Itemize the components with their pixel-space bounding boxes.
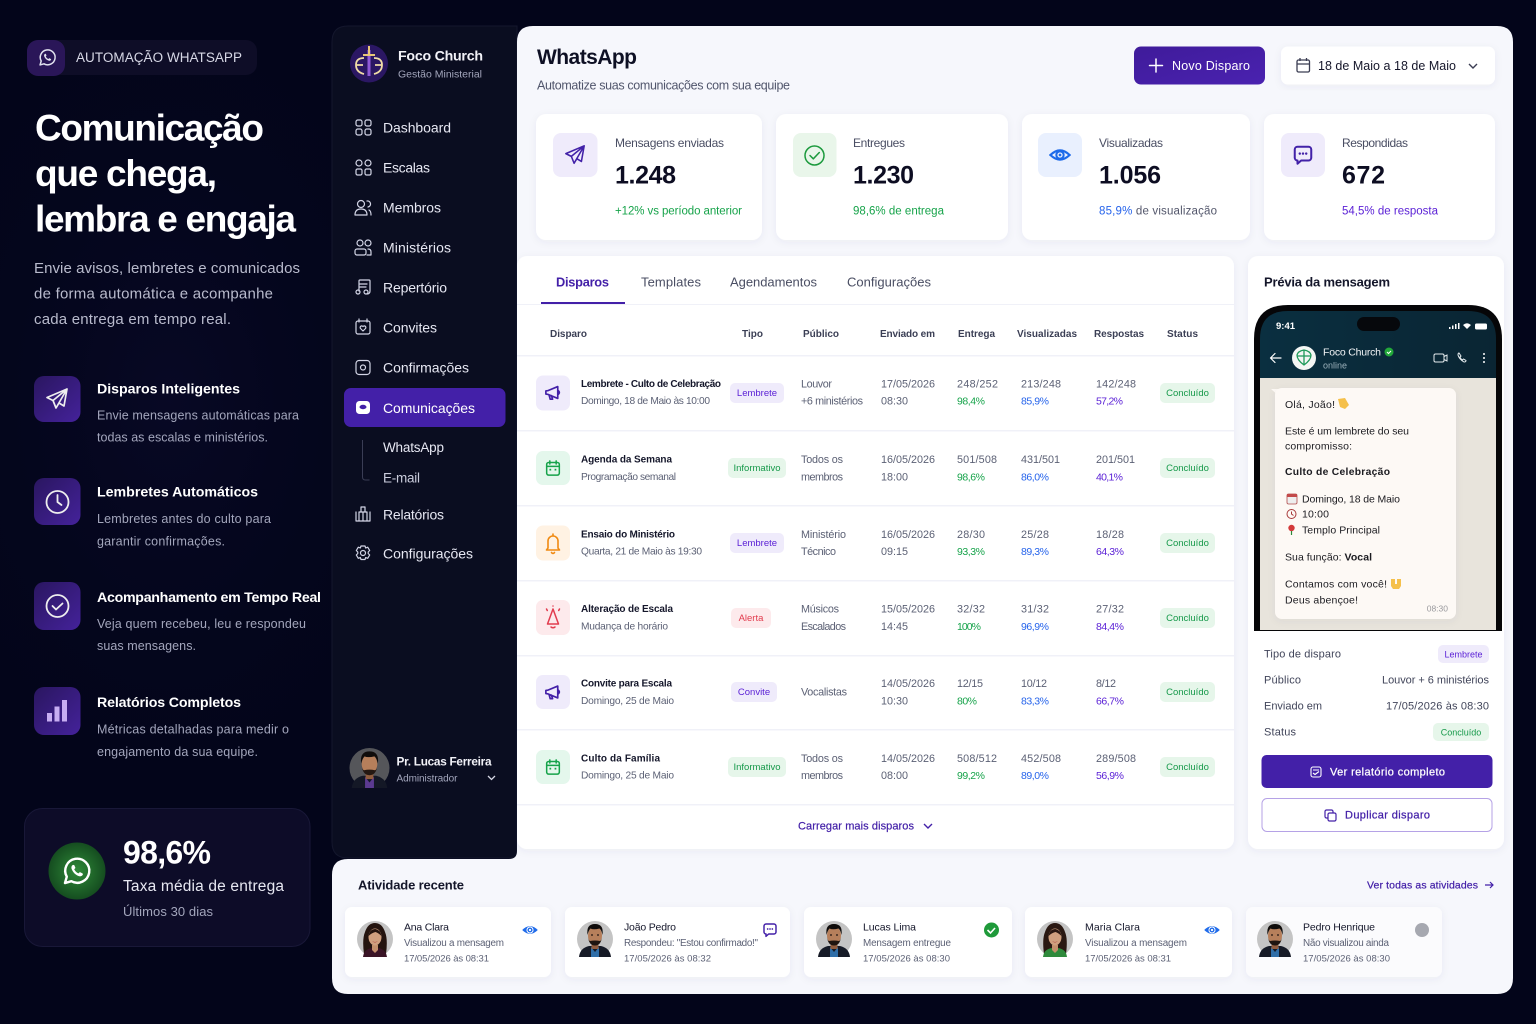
icon: megaphone bbox=[536, 376, 570, 410]
stat card: mensagens enviadas bbox=[536, 114, 762, 240]
row: ensaio do ministério: Lembrete bbox=[737, 538, 777, 549]
icon: calendar green bbox=[536, 750, 570, 784]
activity: maria clara: Maria Clara bbox=[1085, 922, 1140, 934]
row: convite para escala: 8/12 bbox=[1096, 678, 1116, 690]
stat card: entregues: 1.230 bbox=[853, 162, 914, 190]
nav: sub-items bbox=[362, 440, 444, 486]
table header: Visualizadas bbox=[1017, 329, 1077, 340]
activity: pedro henrique: Pedro Henrique bbox=[1303, 922, 1375, 934]
tabs bbox=[541, 275, 932, 304]
row: ensaio do ministério: 93,3% bbox=[957, 546, 985, 558]
activity: pedro henrique: Não visualizou ainda bbox=[1303, 938, 1390, 949]
feature: lembretes automáticos bbox=[34, 478, 271, 549]
nav: escalas: Escalas bbox=[383, 160, 430, 176]
panel: sidebar: Foco Church bbox=[398, 49, 483, 65]
message details: Enviado em bbox=[1264, 701, 1322, 713]
stat card: respondidas: Respondidas bbox=[1342, 136, 1408, 150]
stat card: mensagens enviadas: 1.248 bbox=[615, 162, 676, 190]
row: lembrete culto de celebração: Domingo, 18 de Maio às 10:00 bbox=[581, 396, 710, 407]
row: agenda da semana: 18:00 bbox=[881, 472, 908, 484]
row: lembrete culto de celebração: +6 ministérios bbox=[801, 396, 864, 408]
title bbox=[35, 108, 296, 240]
activity: joão pedro: João Pedro bbox=[624, 922, 676, 934]
header bbox=[537, 46, 790, 93]
row: alteração de escala: Alteração de Escala bbox=[581, 604, 673, 615]
feature: disparos inteligentes: Envie mensagens automáticas para bbox=[97, 409, 299, 423]
row: culto da família: Domingo, 25 de Maio bbox=[581, 771, 674, 782]
feature: disparos inteligentes: todas as escalas e ministérios. bbox=[97, 431, 268, 445]
emoji: hands bbox=[1391, 579, 1401, 589]
icon: check bbox=[793, 133, 836, 177]
feature: relatórios completos: engajamento da sua equipe. bbox=[97, 745, 258, 759]
emoji: wave bbox=[1338, 398, 1349, 409]
icon: bell bbox=[536, 526, 570, 560]
message details: Tipo de disparo bbox=[1264, 649, 1341, 661]
activity: ana clara: Ana Clara bbox=[404, 922, 449, 934]
chat header: online bbox=[1323, 361, 1347, 371]
feature: relatórios completos: Métricas detalhadas para medir o bbox=[97, 723, 289, 737]
user profile bbox=[350, 748, 495, 788]
activity: ana clara: Visualizou a mensagem bbox=[404, 938, 504, 949]
activity: pedro henrique: 17/05/2026 às 08:30 bbox=[1303, 954, 1390, 965]
row: ensaio do ministério: 18/28 bbox=[1096, 529, 1124, 541]
row: ensaio do ministério: Ensaio do Ministério bbox=[581, 530, 675, 541]
row: ensaio do ministério: 09:15 bbox=[881, 546, 908, 558]
row: lembrete culto de celebração: 248/252 bbox=[957, 379, 998, 391]
user profile: Pr. Lucas Ferreira bbox=[396, 755, 492, 769]
row: convite para escala: 80% bbox=[957, 696, 977, 708]
nav: dashboard: Dashboard bbox=[383, 120, 451, 136]
tabs: Disparos bbox=[556, 275, 609, 290]
feature: lembretes automáticos: Lembretes Automáticos bbox=[97, 485, 258, 501]
row: agenda da semana: 501/508 bbox=[957, 454, 997, 466]
badge: automação whatsapp bbox=[27, 40, 257, 76]
row: culto da família: membros bbox=[801, 770, 844, 782]
stat card: respondidas bbox=[1264, 114, 1495, 240]
row: ensaio do ministério: Técnico bbox=[801, 546, 836, 558]
link: ver todas: Ver todas as atividades bbox=[1367, 880, 1478, 892]
row: ensaio do ministério: 16/05/2026 bbox=[881, 529, 935, 541]
row: ensaio do ministério bbox=[536, 526, 1215, 560]
row: agenda da semana: Concluído bbox=[1166, 463, 1209, 474]
message bubble: Templo Principal bbox=[1302, 525, 1380, 537]
row: ensaio do ministério: 25/28 bbox=[1021, 529, 1049, 541]
row: convite para escala: Concluído bbox=[1166, 687, 1209, 698]
nav: configurações: Configurações bbox=[383, 546, 473, 562]
row: lembrete culto de celebração: Louvor bbox=[801, 379, 832, 391]
row: convite para escala: 83,3% bbox=[1021, 696, 1049, 708]
row: convite para escala bbox=[536, 675, 1215, 709]
feature: disparos inteligentes: Disparos Inteligentes bbox=[97, 382, 240, 398]
nav: comunicações active: Comunicações bbox=[383, 400, 475, 416]
message bubble: 10:00 bbox=[1302, 509, 1329, 521]
row: alteração de escala: 100% bbox=[957, 621, 981, 633]
activity: joão pedro bbox=[565, 907, 790, 977]
feature: acompanhamento em tempo real: suas mensagens. bbox=[97, 639, 196, 653]
message bubble: Culto de Celebração bbox=[1285, 467, 1390, 478]
intro text: de forma automática e acompanhe bbox=[34, 286, 273, 303]
icon: chat bbox=[1281, 133, 1325, 177]
title: lembra e engaja bbox=[35, 199, 296, 240]
panel: sidebar bbox=[332, 26, 517, 858]
stat card: visualizadas: 1.056 bbox=[1099, 162, 1161, 190]
message details: Status bbox=[1264, 727, 1296, 739]
stat card: visualizadas bbox=[1022, 114, 1250, 240]
intro text: cada entrega em tempo real. bbox=[34, 311, 231, 328]
icon: calendar green bbox=[536, 451, 570, 485]
icon: plane bbox=[553, 133, 598, 177]
row: culto da família: Todos os bbox=[801, 753, 844, 765]
feature: acompanhamento em tempo real: Veja quem recebeu, leu e respondeu bbox=[97, 617, 306, 631]
row: culto da família: Informativo bbox=[734, 762, 780, 773]
icon: megaphone bbox=[536, 675, 570, 709]
icon: paper plane bbox=[34, 376, 80, 422]
chat header bbox=[1270, 346, 1485, 371]
row: agenda da semana: 98,6% bbox=[957, 472, 985, 484]
status icons bbox=[1449, 323, 1487, 330]
row: alteração de escala: 27/32 bbox=[1096, 604, 1124, 616]
icon: check circle bbox=[34, 582, 80, 630]
message bubble: Contamos com você! bbox=[1285, 579, 1387, 591]
emoji: clock bbox=[1287, 510, 1296, 518]
row: lembrete culto de celebração: Concluído bbox=[1166, 388, 1209, 399]
icon: clock bbox=[34, 478, 80, 525]
stat card: respondidas: 672 bbox=[1342, 162, 1385, 190]
row: agenda da semana: membros bbox=[801, 472, 844, 484]
message details: Lembrete bbox=[1444, 650, 1483, 660]
table header: Disparo bbox=[550, 329, 587, 340]
row: agenda da semana: 40,1% bbox=[1096, 472, 1123, 484]
icon: whatsapp bbox=[48, 842, 106, 900]
user profile: Administrador bbox=[396, 774, 458, 785]
nav: repertório: Repertório bbox=[383, 280, 447, 296]
row: alteração de escala: Mudança de horário bbox=[581, 622, 668, 633]
panel: disparos table bbox=[517, 256, 1234, 849]
icon: eye bbox=[1038, 133, 1082, 177]
message details: Louvor + 6 ministérios bbox=[1382, 675, 1490, 687]
feature: lembretes automáticos: garantir confirmações. bbox=[97, 535, 225, 549]
panel: prévia da mensagem: Prévia da mensagem bbox=[1264, 275, 1390, 290]
row: ensaio do ministério: 89,3% bbox=[1021, 546, 1049, 558]
panel: atividade recente bbox=[345, 878, 1493, 977]
date selector bbox=[1281, 46, 1495, 84]
title: Comunicação bbox=[35, 108, 264, 149]
nav: membros: Membros bbox=[383, 200, 441, 216]
row: agenda da semana: Agenda da Semana bbox=[581, 455, 672, 466]
row: culto da família: 56,9% bbox=[1096, 770, 1124, 782]
row: culto da família bbox=[536, 750, 1215, 784]
activity: lucas lima: 17/05/2026 às 08:30 bbox=[863, 954, 950, 965]
header: Automatize suas comunicações com sua equipe bbox=[537, 79, 790, 93]
row: culto da família: 289/508 bbox=[1096, 753, 1136, 765]
nav: sub-items: E-mail bbox=[383, 471, 420, 486]
button: duplicar disparo: Duplicar disparo bbox=[1345, 810, 1430, 822]
row: ensaio do ministério: Ministério bbox=[801, 529, 846, 541]
row: convite para escala: Convite para Escala bbox=[581, 679, 672, 690]
row: alteração de escala: Escalados bbox=[801, 621, 847, 633]
panel: atividade recente: Atividade recente bbox=[358, 878, 464, 893]
table header: Respostas bbox=[1094, 329, 1144, 340]
row: agenda da semana: Informativo bbox=[734, 463, 780, 474]
row: alteração de escala: 96,9% bbox=[1021, 621, 1049, 633]
activity: pedro henrique bbox=[1246, 907, 1442, 977]
row: convite para escala: 66,7% bbox=[1096, 696, 1124, 708]
row: convite para escala: 14/05/2026 bbox=[881, 678, 935, 690]
callout: taxa média de entrega bbox=[24, 808, 310, 946]
row: alteração de escala: Alerta bbox=[739, 613, 764, 624]
table header bbox=[550, 329, 1198, 340]
feature: lembretes automáticos: Lembretes antes do culto para bbox=[97, 512, 271, 526]
row: ensaio do ministério: 64,3% bbox=[1096, 546, 1124, 558]
nav: confirmações: Confirmações bbox=[383, 360, 469, 376]
table header: Enviado em bbox=[880, 329, 935, 340]
nav: escalas bbox=[356, 160, 430, 176]
row: ensaio do ministério: Concluído bbox=[1166, 538, 1209, 549]
button: novo disparo: Novo Disparo bbox=[1172, 59, 1250, 73]
table header: Público bbox=[803, 329, 839, 340]
header: WhatsApp bbox=[537, 46, 637, 69]
badge: automação whatsapp: AUTOMAÇÃO WHATSAPP bbox=[76, 50, 242, 65]
chat header: Foco Church bbox=[1323, 347, 1381, 359]
button: novo disparo bbox=[1134, 46, 1265, 84]
row: agenda da semana: 431/501 bbox=[1021, 454, 1060, 466]
stat card: visualizadas: 85,9% de visualização bbox=[1099, 206, 1217, 218]
row: lembrete culto de celebração: Lembrete bbox=[737, 388, 777, 399]
row: lembrete culto de celebração: 08:30 bbox=[881, 396, 908, 408]
link: carregar mais: Carregar mais disparos bbox=[798, 821, 914, 833]
row: culto da família: 99,2% bbox=[957, 770, 985, 782]
nav: sub-items: WhatsApp bbox=[383, 440, 444, 455]
row: alteração de escala: 84,4% bbox=[1096, 621, 1124, 633]
callout: taxa média de entrega: Últimos 30 dias bbox=[123, 904, 214, 919]
stat card: entregues: 98,6% de entrega bbox=[853, 206, 945, 218]
table header: Tipo bbox=[742, 329, 763, 340]
message bubble: 08:30 bbox=[1427, 604, 1448, 614]
stat card: entregues bbox=[776, 114, 1008, 240]
row: alteração de escala: 31/32 bbox=[1021, 604, 1049, 616]
panel: sidebar: Gestão Ministerial bbox=[398, 69, 482, 81]
activity: joão pedro: Respondeu: "Estou confirmado!" bbox=[624, 938, 758, 949]
nav: convites bbox=[356, 319, 437, 336]
row: agenda da semana: Programação semanal bbox=[581, 472, 676, 483]
row: convite para escala: Vocalistas bbox=[801, 687, 848, 699]
intro text bbox=[34, 260, 300, 328]
stat card: mensagens enviadas: Mensagens enviadas bbox=[615, 136, 724, 150]
feature: relatórios completos: Relatórios Completos bbox=[97, 695, 241, 711]
phone mockup: 9:41 bbox=[1276, 321, 1296, 332]
row: convite para escala: 10:30 bbox=[881, 696, 908, 708]
tabs: Configurações bbox=[847, 275, 932, 290]
message bubble: Olá, João! bbox=[1285, 399, 1335, 411]
activity: ana clara bbox=[345, 907, 551, 977]
row: ensaio do ministério: Quarta, 21 de Maio às 19:30 bbox=[581, 547, 702, 558]
logo bbox=[350, 44, 388, 82]
message bubble: Sua função: Vocal bbox=[1285, 552, 1372, 564]
row: alteração de escala: Concluído bbox=[1166, 613, 1209, 624]
row: convite para escala: Convite bbox=[738, 687, 770, 698]
row: ensaio do ministério: 28/30 bbox=[957, 529, 985, 541]
row: culto da família: 452/508 bbox=[1021, 753, 1061, 765]
message bubble: Domingo, 18 de Maio bbox=[1302, 494, 1400, 506]
message details: Concluído bbox=[1441, 728, 1481, 738]
button: ver relatório completo bbox=[1262, 755, 1492, 788]
nav: ministérios: Ministérios bbox=[383, 240, 451, 256]
activity: joão pedro: 17/05/2026 às 08:32 bbox=[624, 954, 711, 965]
row: lembrete culto de celebração: 213/248 bbox=[1021, 379, 1061, 391]
row: agenda da semana: 16/05/2026 bbox=[881, 454, 935, 466]
emoji: pin bbox=[1288, 525, 1295, 535]
panel: prévia da mensagem bbox=[1248, 256, 1504, 849]
nav: relatórios bbox=[356, 507, 444, 523]
row: lembrete culto de celebração bbox=[536, 376, 1215, 410]
activity: maria clara: Visualizou a mensagem bbox=[1085, 938, 1187, 949]
message details: 17/05/2026 às 08:30 bbox=[1386, 701, 1489, 713]
activity: lucas lima: Mensagem entregue bbox=[863, 938, 952, 949]
row: convite para escala: Domingo, 25 de Maio bbox=[581, 696, 674, 707]
row: lembrete culto de celebração: 142/248 bbox=[1096, 379, 1136, 391]
row: convite para escala: 10/12 bbox=[1021, 678, 1047, 690]
row: agenda da semana bbox=[536, 451, 1215, 485]
feature: acompanhamento em tempo real bbox=[34, 582, 321, 653]
feature: relatórios completos bbox=[34, 687, 289, 759]
intro text: Envie avisos, lembretes e comunicados bbox=[34, 260, 300, 277]
row: alteração de escala: 14:45 bbox=[881, 621, 908, 633]
row: culto da família: Culto da Família bbox=[581, 754, 660, 765]
row: lembrete culto de celebração: 98,4% bbox=[957, 396, 985, 408]
row: lembrete culto de celebração: Lembrete - Culto de Celebração bbox=[581, 379, 721, 390]
row: culto da família: 89,0% bbox=[1021, 770, 1049, 782]
emoji: calendar bbox=[1287, 494, 1297, 504]
button: duplicar disparo bbox=[1262, 798, 1492, 832]
stat card: visualizadas: Visualizadas bbox=[1099, 136, 1163, 150]
activity: lucas lima: Lucas Lima bbox=[863, 922, 916, 934]
row: alteração de escala: 32/32 bbox=[957, 604, 985, 616]
row: lembrete culto de celebração: 85,9% bbox=[1021, 396, 1049, 408]
title: que chega, bbox=[35, 153, 217, 194]
activity: ana clara: 17/05/2026 às 08:31 bbox=[404, 954, 489, 965]
row: agenda da semana: 201/501 bbox=[1096, 454, 1135, 466]
icon: bar chart bbox=[34, 687, 80, 735]
nav: convites: Convites bbox=[383, 320, 437, 336]
stat card: mensagens enviadas: +12% vs período anterior bbox=[615, 206, 742, 218]
nav: membros bbox=[355, 200, 441, 216]
stat card: entregues: Entregues bbox=[853, 136, 905, 150]
callout: taxa média de entrega: 98,6% bbox=[123, 835, 211, 871]
row: agenda da semana: Todos os bbox=[801, 454, 844, 466]
activity: lucas lima bbox=[804, 907, 1012, 977]
icon: alert bbox=[536, 600, 570, 635]
tabs: Agendamentos bbox=[730, 275, 818, 290]
message bubble bbox=[1271, 388, 1456, 619]
row: lembrete culto de celebração: 17/05/2026 bbox=[881, 379, 935, 391]
row: convite para escala: 12/15 bbox=[957, 678, 983, 690]
callout: taxa média de entrega: Taxa média de entrega bbox=[123, 878, 284, 895]
nav: comunicações active bbox=[344, 388, 506, 427]
row: culto da família: 508/512 bbox=[957, 753, 997, 765]
row: culto da família: Concluído bbox=[1166, 762, 1209, 773]
row: agenda da semana: 86,0% bbox=[1021, 472, 1049, 484]
message details: Público bbox=[1264, 675, 1301, 687]
tabs: Templates bbox=[641, 275, 702, 290]
message bubble: Deus abençoe! bbox=[1285, 595, 1358, 607]
message details bbox=[1264, 645, 1490, 741]
button: ver relatório completo: Ver relatório completo bbox=[1330, 767, 1445, 779]
activity: maria clara bbox=[1025, 907, 1232, 977]
row: lembrete culto de celebração: 57,2% bbox=[1096, 396, 1123, 408]
row: culto da família: 14/05/2026 bbox=[881, 753, 935, 765]
stat card: respondidas: 54,5% de resposta bbox=[1342, 206, 1439, 218]
row: culto da família: 08:00 bbox=[881, 770, 908, 782]
row: alteração de escala: 15/05/2026 bbox=[881, 604, 935, 616]
feature: disparos inteligentes bbox=[34, 376, 299, 445]
message bubble: Este é um lembrete do seu bbox=[1285, 426, 1409, 438]
feature: acompanhamento em tempo real: Acompanhamento em Tempo Real bbox=[97, 590, 321, 606]
panel: main background bbox=[332, 26, 1513, 994]
message bubble: compromisso: bbox=[1285, 441, 1352, 453]
table header: Status bbox=[1167, 329, 1198, 340]
activity: maria clara: 17/05/2026 às 08:31 bbox=[1085, 954, 1171, 965]
row: alteração de escala: Músicos bbox=[801, 604, 840, 616]
table header: Entrega bbox=[958, 329, 995, 340]
phone mockup bbox=[1254, 305, 1502, 631]
date selector: 18 de Maio a 18 de Maio bbox=[1318, 59, 1456, 73]
nav: relatórios: Relatórios bbox=[383, 507, 444, 523]
row: alteração de escala bbox=[536, 600, 1215, 635]
